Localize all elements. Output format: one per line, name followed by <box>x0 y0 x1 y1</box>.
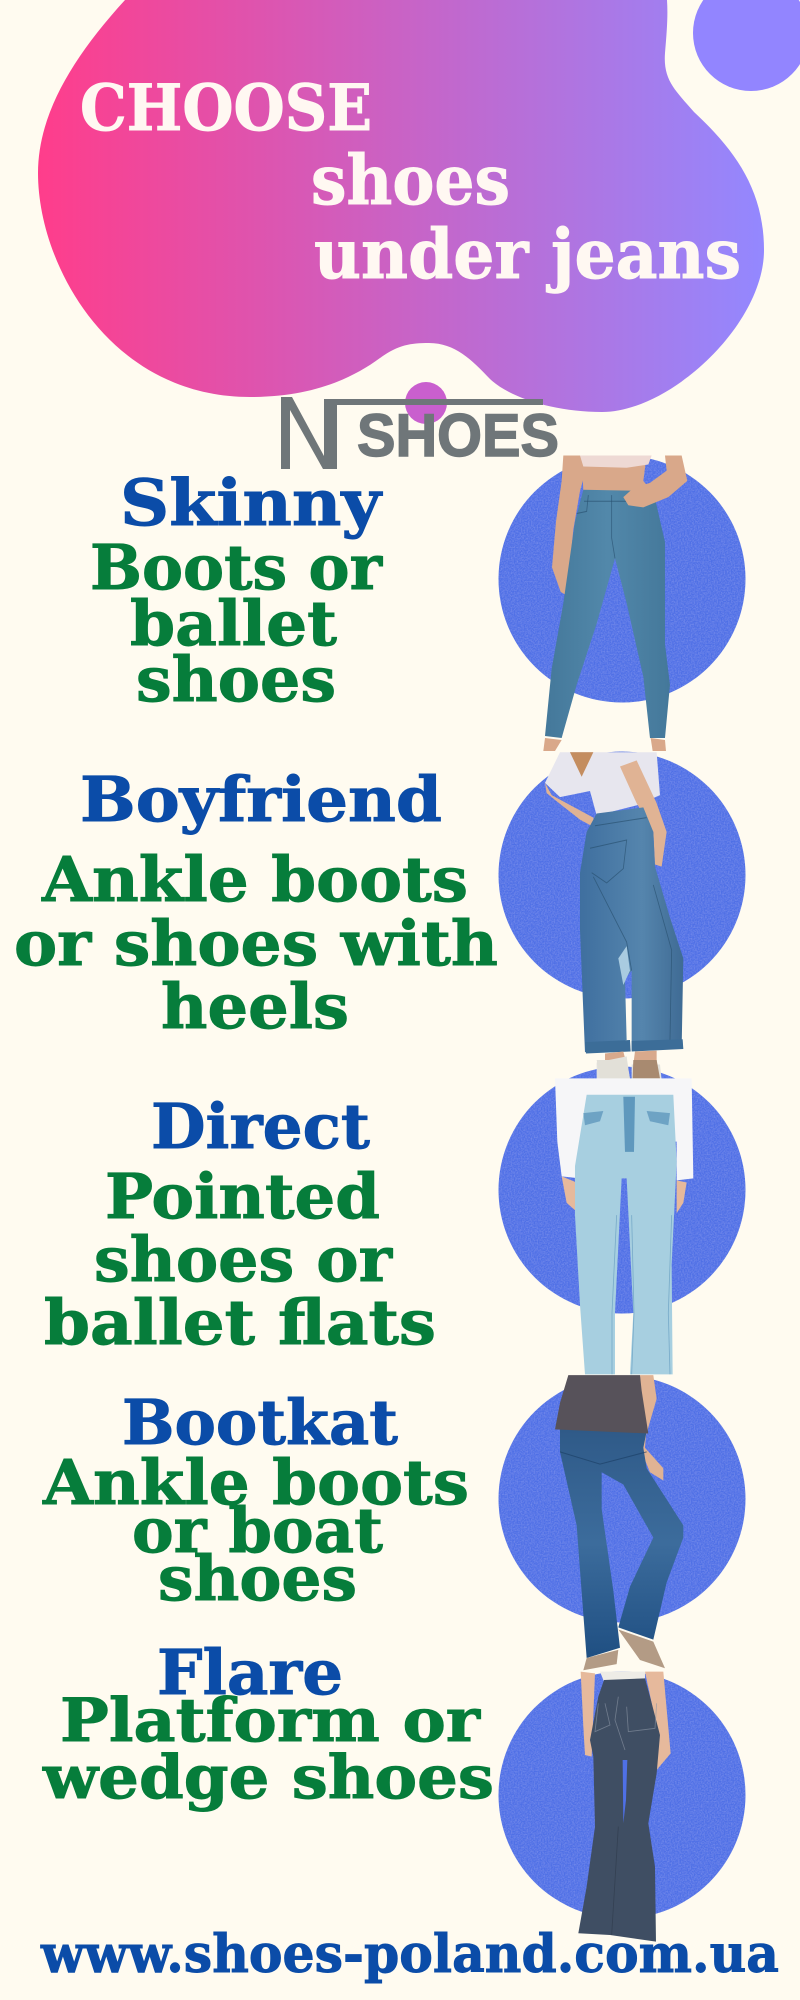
text: Skinny: ballet <box>130 587 337 660</box>
photo: direct jeans <box>555 1060 693 1374</box>
text: Flare: Platform or <box>60 1686 481 1756</box>
title: under jeans <box>314 215 741 295</box>
photo: flare jeans <box>578 1672 671 1942</box>
text: Boyfriend: Ankle boots <box>41 843 468 916</box>
text: Direct: Pointed <box>105 1160 380 1233</box>
circle: boyfriend <box>498 752 746 998</box>
circle: flare <box>498 1672 746 1918</box>
title: CHOOSE <box>80 71 372 146</box>
logo: N SHOES <box>281 382 559 469</box>
circle: direct <box>498 1066 746 1314</box>
text: Direct <box>44 1090 436 1359</box>
circle: skinny <box>498 456 746 702</box>
text: Bootkat: Bootkat <box>122 1386 398 1459</box>
gradient blob header <box>38 0 764 412</box>
decorative circle top right <box>693 0 800 91</box>
text: Flare: wedge shoes <box>42 1743 494 1813</box>
text: Flare <box>42 1636 494 1813</box>
text: Direct: Direct <box>151 1090 370 1163</box>
photo: boyfriend jeans <box>545 752 683 1080</box>
text: Direct: ballet flats <box>44 1286 436 1359</box>
logo: N SHOES: SHOES <box>357 402 559 469</box>
title: shoes <box>311 141 510 221</box>
text: Bootkat <box>42 1386 469 1615</box>
text: Skinny: shoes <box>136 643 336 716</box>
photo: skinny jeans <box>543 456 687 751</box>
text: Boyfriend <box>14 763 498 1043</box>
website url: www.shoes-poland.com.ua <box>40 1924 779 1985</box>
text: Boyfriend: heels <box>161 970 349 1043</box>
text: Bootkat: or boat <box>132 1494 383 1567</box>
text: Boyfriend: or shoes with <box>14 907 498 980</box>
text: Boyfriend: Boyfriend <box>80 763 442 836</box>
text: Skinny: Skinny <box>120 466 383 541</box>
text: Bootkat: shoes <box>158 1542 357 1615</box>
text: Skinny <box>90 466 383 716</box>
text: Skinny: Boots or <box>90 531 383 604</box>
title <box>80 71 741 295</box>
text: Bootkat: Ankle boots <box>42 1446 469 1519</box>
text: Direct: shoes or <box>94 1223 393 1296</box>
circle: bootkat <box>498 1376 746 1622</box>
text: Flare: Flare <box>157 1636 343 1709</box>
photo: bootkat jeans <box>555 1375 683 1670</box>
